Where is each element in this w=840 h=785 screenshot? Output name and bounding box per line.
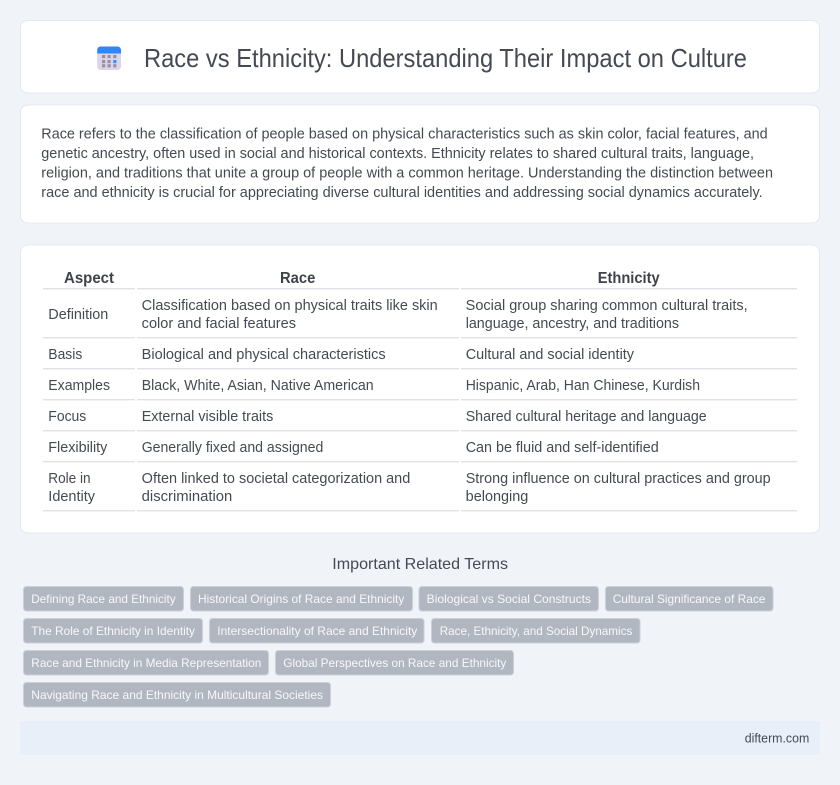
tag: Biological vs Social Constructs: [427, 592, 591, 606]
table row: Examples: Black, White, Asian, Native American: [142, 378, 374, 394]
table row: Role in Identity: discrimination: [142, 489, 232, 505]
table row: Definition: [43, 298, 797, 338]
tag: [419, 586, 598, 611]
table row: Definition: Social group sharing common cultural traits,: [466, 298, 748, 314]
heading: Important Related Terms: Important Related Terms: [332, 556, 508, 573]
table row: Basis: [43, 347, 797, 369]
table row: Basis: Basis: [48, 347, 82, 363]
tag: Navigating Race and Ethnicity in Multicultural Societies: [31, 688, 323, 702]
table row: Definition: color and facial features: [142, 316, 296, 332]
table header row: [43, 270, 797, 289]
table row: Examples: Hispanic, Arab, Han Chinese, Kurdish: [466, 378, 700, 394]
table row: Definition: Definition: [48, 307, 108, 323]
table row: Basis: Cultural and social identity: [466, 347, 635, 363]
tag: Intersectionality of Race and Ethnicity: [217, 624, 417, 638]
panel: related term tags: [24, 586, 773, 707]
table row: Basis: Biological and physical characteristics: [142, 347, 386, 363]
table row: Role in Identity: Strong influence on cultural practices and group: [466, 471, 771, 487]
table row: Role in Identity: Identity: [48, 489, 96, 505]
footer: [20, 721, 820, 755]
tag: [606, 586, 773, 611]
text block: introduction paragraph: [41, 126, 773, 201]
tag: [24, 586, 184, 611]
tag: Defining Race and Ethnicity: [31, 592, 176, 606]
panel: introduction: [20, 105, 820, 223]
table row: Flexibility: [43, 440, 797, 462]
text block: introduction paragraph: race and ethnicity is crucial for appreciating diverse cultural identities and addressing social dynamics accurately.: [41, 185, 763, 201]
title: Race vs Ethnicity: Understanding Their Impact on Culture: [144, 45, 747, 73]
table row: Role in Identity: [43, 471, 797, 511]
table row: Definition: Classification based on physical traits like skin: [142, 298, 438, 314]
table row: Flexibility: Flexibility: [48, 440, 108, 456]
table row: Flexibility: Can be fluid and self-identified: [466, 440, 659, 456]
tag: [24, 650, 268, 675]
table row: Focus: External visible traits: [142, 409, 273, 425]
table row: Focus: Focus: [48, 409, 86, 425]
table header row: Ethnicity: [598, 270, 660, 287]
table row: Examples: [43, 378, 797, 400]
table row: Focus: [43, 409, 797, 431]
tag: Race, Ethnicity, and Social Dynamics: [440, 624, 632, 638]
tag: [276, 650, 514, 675]
tag: [210, 618, 424, 643]
tag: [24, 618, 202, 643]
table header row: Aspect: [64, 270, 115, 287]
tag: Historical Origins of Race and Ethnicity: [198, 592, 404, 606]
table row: Examples: Examples: [48, 378, 110, 394]
table row: Flexibility: Generally fixed and assigned: [142, 440, 323, 456]
table row: Definition: language, ancestry, and traditions: [466, 316, 679, 332]
text block: introduction paragraph: genetic ancestry, often used in social and historical contexts. Ethnicity relates to shared cultural traits, language,: [41, 146, 754, 162]
table row: Role in Identity: belonging: [466, 489, 528, 505]
tag: Global Perspectives on Race and Ethnicity: [283, 656, 506, 670]
icon: calendar: [97, 46, 121, 70]
tag: [24, 682, 330, 707]
panel: header: [20, 20, 820, 93]
tag: [190, 586, 412, 611]
tag: The Role of Ethnicity in Identity: [31, 624, 195, 638]
text block: introduction paragraph: Race refers to the classification of people based on physical characteristics such as skin color, facial features, and: [41, 126, 768, 142]
text block: introduction paragraph: religion, and traditions that unite a group of people with a common heritage. Understanding the distinction between: [41, 166, 773, 182]
table row: Focus: Shared cultural heritage and language: [466, 409, 707, 425]
footer source text: difterm.com: [745, 730, 809, 746]
table row: Role in Identity: Often linked to societal categorization and: [142, 471, 410, 487]
table row: Role in Identity: Role in: [48, 471, 91, 487]
panel: comparison table: [20, 245, 820, 533]
table header row: Race: [280, 270, 315, 287]
tag: [432, 618, 640, 643]
tag: Cultural Significance of Race: [613, 592, 766, 606]
tag: Race and Ethnicity in Media Representation: [31, 656, 261, 670]
